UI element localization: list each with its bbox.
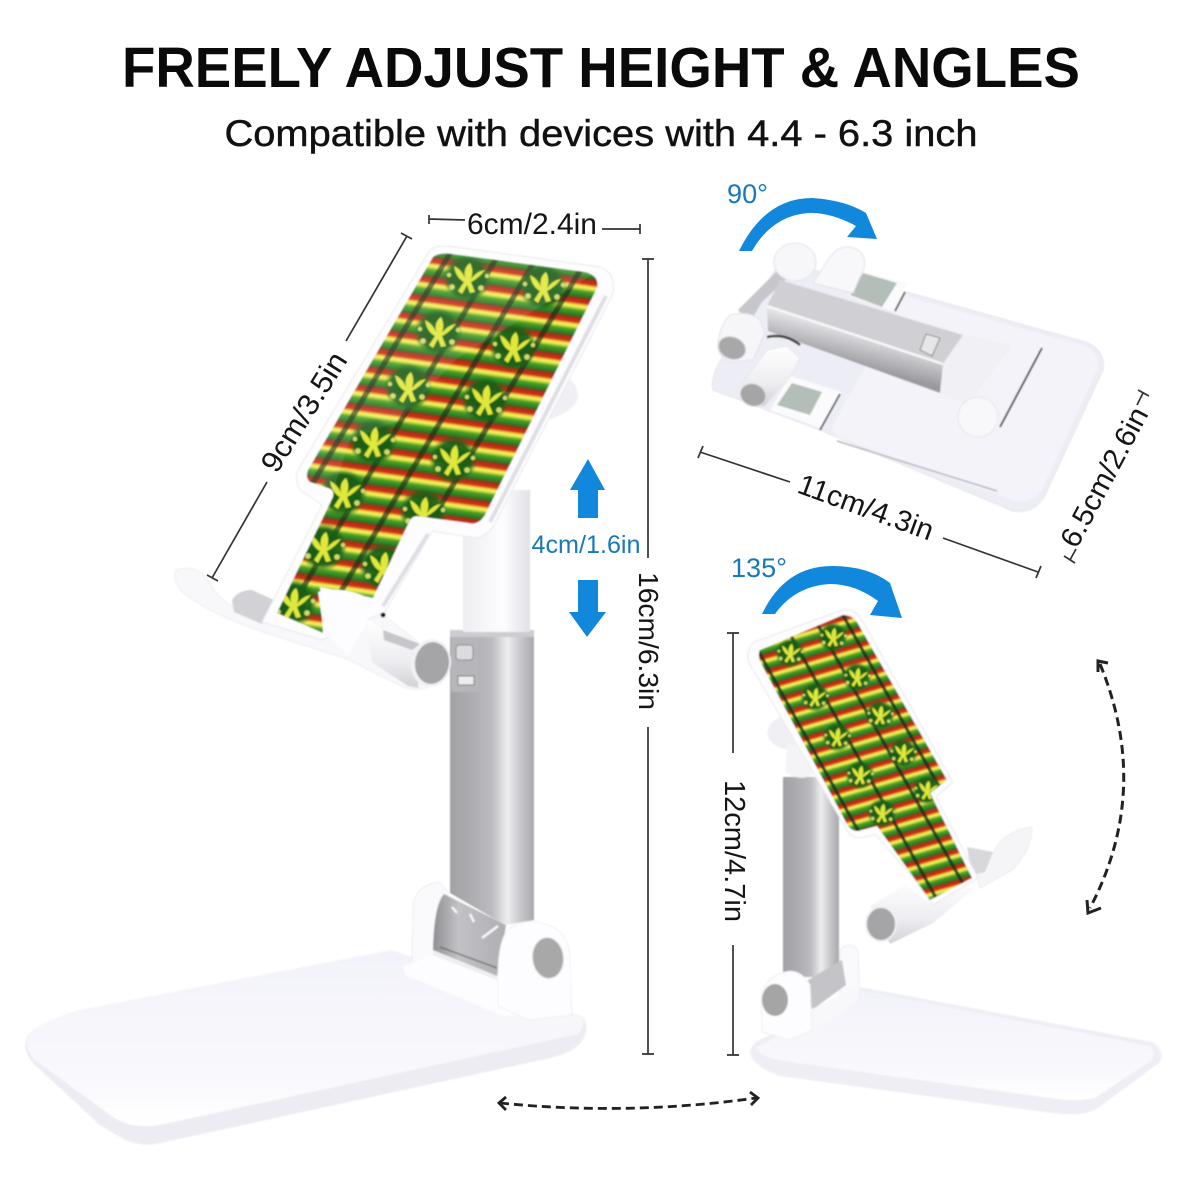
front roller with grey end — [737, 346, 800, 410]
dimension: 6cm width — [429, 208, 640, 241]
folded base plate — [712, 262, 1103, 511]
dimension: 16cm height: 16cm/6.3in — [633, 572, 664, 710]
rear lug — [840, 945, 860, 1002]
dimension: 12cm height — [718, 633, 750, 1055]
rear rollers — [774, 243, 865, 293]
folded stand top view — [712, 243, 1103, 511]
dimension: 9cm height: 9cm/3.5in — [255, 346, 354, 478]
dimension: 6cm width: 6cm/2.4in — [467, 208, 597, 241]
adjustment range: 4cm with arrows — [532, 459, 640, 637]
hinge barrel — [433, 894, 506, 982]
adjustment range: 4cm with arrows: 4cm/1.6in — [532, 531, 640, 559]
subtitle: Compatible with devices with 4.4 - 6.3 inch — [224, 113, 978, 154]
icon: horizontal dashed swivel arrow — [499, 1092, 758, 1110]
tilted stand base — [750, 987, 1161, 1114]
left frame strip — [738, 268, 792, 322]
rear knob and collar — [767, 714, 812, 778]
white upper column — [463, 490, 530, 632]
white wedge over stem — [318, 590, 372, 655]
stand base — [25, 950, 586, 1145]
silver column — [783, 777, 839, 977]
dark gap between rollers — [767, 336, 800, 345]
inner plate — [832, 296, 1098, 502]
large phone stand at full height — [25, 230, 620, 1145]
hook with cylinder foot — [866, 827, 1032, 944]
printed pattern on plate — [758, 614, 973, 901]
bottom slot — [770, 376, 842, 430]
dimension: 16cm height — [633, 259, 664, 1054]
title: FREELY ADJUST HEIGHT & ANGLES — [122, 36, 1080, 100]
lower hinge platform and lug — [403, 922, 572, 1020]
white phone plate — [262, 246, 614, 640]
silver bar — [767, 280, 963, 393]
rear hinge lug — [412, 882, 448, 962]
bar end cap — [942, 335, 1012, 404]
top slot — [848, 270, 908, 312]
telescopic silver column — [450, 630, 534, 925]
plate right edge shading — [383, 296, 606, 606]
right knob — [958, 397, 998, 437]
icon: up arrow — [570, 459, 605, 518]
hook pin — [381, 613, 385, 617]
dimension: 6.5cm width: 6.5cm/2.6in — [1055, 402, 1155, 553]
dimension: 12cm height: 12cm/4.7in — [718, 780, 750, 922]
tilted phone stand at 135 degrees — [740, 600, 1161, 1114]
icon: blue 90 degree arc arrow — [739, 198, 877, 251]
dimension: 11cm length: 11cm/4.3in — [793, 469, 938, 547]
white phone plate — [748, 610, 978, 905]
left roller with grey end — [715, 313, 765, 363]
icon: curved dashed tilt arrow — [1087, 661, 1124, 913]
icon: down arrow — [569, 580, 606, 637]
dimension: 9cm height — [207, 233, 412, 581]
label: 135 degrees: 135° — [731, 553, 787, 583]
phone hook with cylinder foot — [175, 520, 454, 690]
label: 90 degrees: 90° — [727, 179, 768, 209]
phone holder rear knob — [540, 378, 578, 420]
printed pattern on plate — [276, 252, 598, 634]
hinge with grey end — [761, 960, 860, 1040]
icon: blue 135 degree arc arrow — [762, 566, 902, 618]
dimension: 11cm length — [698, 446, 1041, 578]
